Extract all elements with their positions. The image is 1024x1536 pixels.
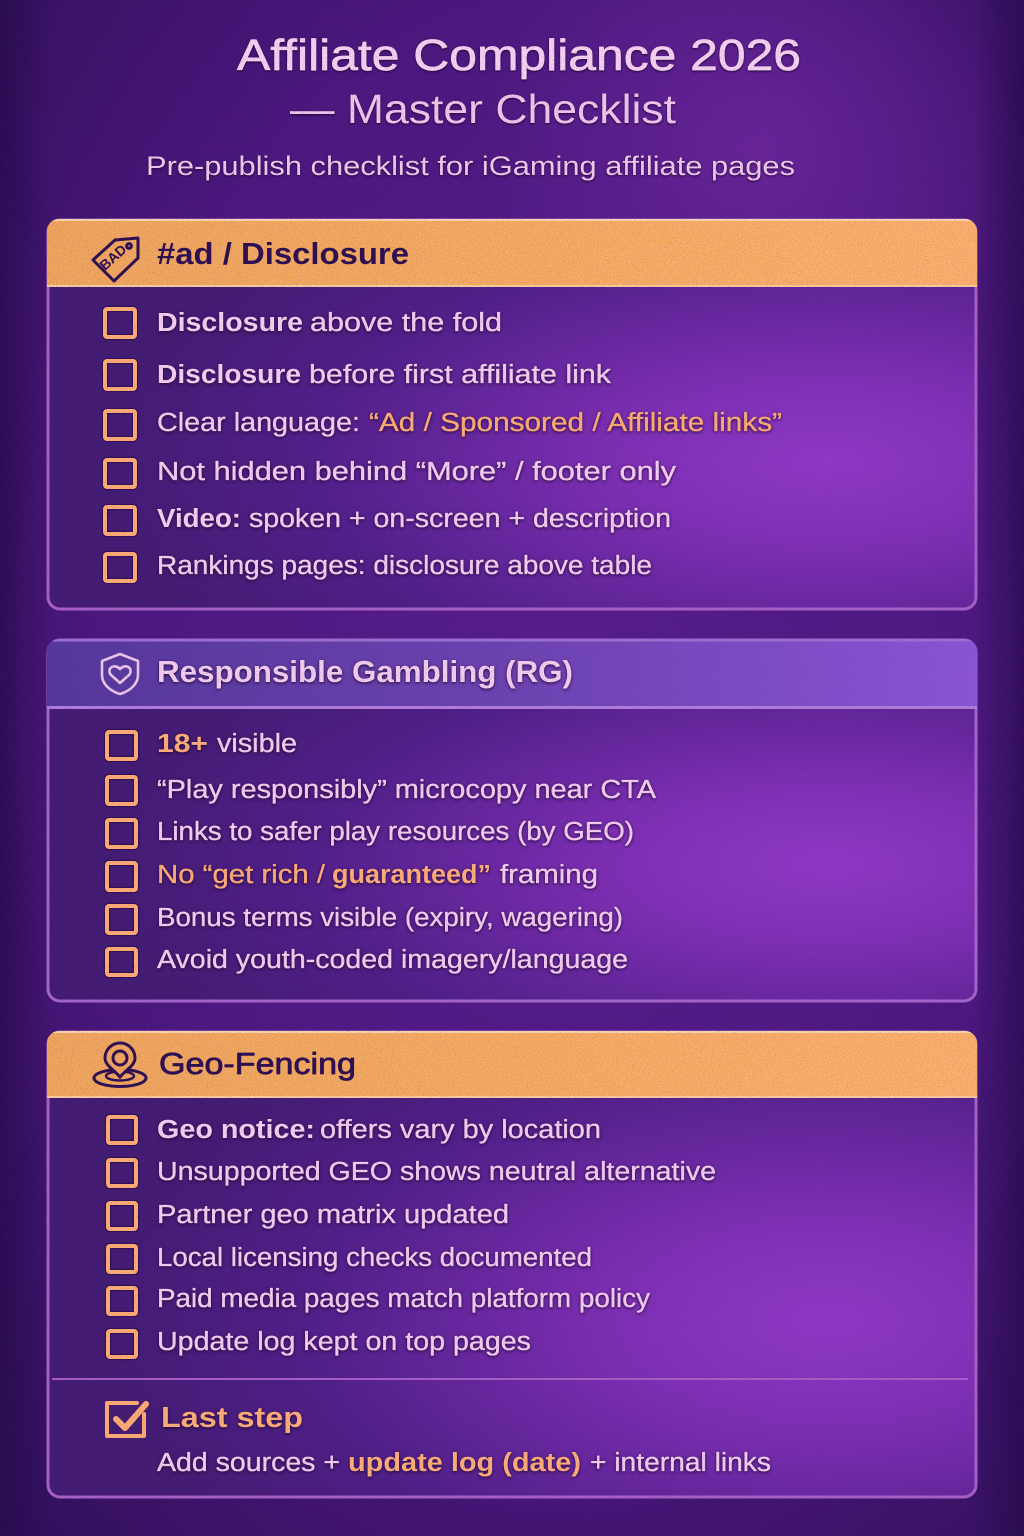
checklist item 2: Unsupported GEO shows neutral alternative bbox=[157, 1158, 716, 1186]
last step block bbox=[107, 1402, 771, 1477]
icon: price tag bbox=[93, 238, 138, 281]
panel: #ad / Disclosure bbox=[47, 219, 977, 609]
heading: #ad / Disclosure: #ad / Disclosure bbox=[157, 236, 409, 271]
checklist item 4 bbox=[107, 861, 598, 890]
checklist item 5: Bonus terms visible (expiry, wagering) bbox=[157, 904, 623, 932]
last step text: update log (date) bbox=[348, 1449, 581, 1477]
subtitle: Pre-publish checklist for iGaming affiliate pages bbox=[146, 151, 795, 181]
heading: Geo-Fencing: Geo-Fencing bbox=[159, 1046, 356, 1081]
checklist item 6: Rankings pages: disclosure above table bbox=[157, 552, 652, 580]
checklist item 4: Not hidden behind “More” / footer only bbox=[157, 458, 676, 486]
icon: checked box bbox=[107, 1403, 146, 1436]
title block bbox=[146, 31, 801, 181]
title line 2: — Master Checklist bbox=[290, 86, 677, 132]
heading: Last step: Last step bbox=[161, 1402, 303, 1434]
last step text: Add sources + bbox=[157, 1449, 340, 1477]
heading: Responsible Gambling (RG): Responsible Gambling (RG) bbox=[157, 654, 573, 689]
checklist item 1: 18+ bbox=[157, 730, 208, 758]
icon: map pin bbox=[94, 1043, 146, 1086]
checklist item 2: before first affiliate link bbox=[309, 361, 611, 389]
checklist item 4: guaranteed” bbox=[332, 861, 491, 889]
checklist item 5: spoken + on-screen + description bbox=[249, 505, 671, 533]
icon: price tag: BAD bbox=[96, 241, 130, 273]
checklist item 1: above the fold bbox=[310, 309, 502, 337]
checklist item 2: “Play responsibly” microcopy near CTA bbox=[157, 776, 656, 804]
checklist item 1 bbox=[108, 1116, 601, 1144]
checklist item 5: Video: bbox=[157, 505, 241, 533]
panel header: responsible gambling bbox=[47, 639, 977, 709]
checklist item 3: “Ad / Sponsored / Affiliate links” bbox=[369, 409, 782, 437]
checklist item 3 bbox=[105, 409, 782, 439]
panel: Responsible Gambling bbox=[47, 639, 977, 1001]
checklist item 1: offers vary by location bbox=[320, 1116, 601, 1144]
title line 1: Affiliate Compliance 2026 bbox=[237, 31, 801, 80]
checklist item 4: framing bbox=[500, 861, 598, 889]
last step text bbox=[157, 1449, 771, 1477]
checklist item 3: Clear language: bbox=[157, 409, 360, 437]
checklist item 2: Disclosure bbox=[157, 361, 301, 389]
checklist item 1 bbox=[107, 730, 297, 759]
checklist item 4: No “get rich / bbox=[157, 861, 326, 889]
checklist item 3: Partner geo matrix updated bbox=[157, 1201, 509, 1229]
panel header: geo-fencing bbox=[47, 1031, 977, 1098]
last step text: + internal links bbox=[590, 1449, 771, 1477]
icon: shield with heart bbox=[102, 654, 138, 694]
checklist item 3: Links to safer play resources (by GEO) bbox=[157, 818, 634, 846]
checklist item 2 bbox=[105, 361, 611, 389]
checklist item 5 bbox=[105, 505, 671, 534]
checklist item 6: Update log kept on top pages bbox=[157, 1328, 531, 1356]
panel: Geo-Fencing bbox=[47, 1031, 977, 1497]
checklist item 5: Paid media pages match platform policy bbox=[157, 1285, 650, 1313]
checklist item 1: Disclosure bbox=[157, 309, 303, 337]
checklist item 1 bbox=[105, 309, 502, 337]
checklist item 6: Avoid youth-coded imagery/language bbox=[157, 946, 628, 974]
checklist item 1: visible bbox=[217, 730, 297, 758]
checklist item 4: Local licensing checks documented bbox=[157, 1244, 592, 1272]
checklist item 1: Geo notice: bbox=[157, 1116, 315, 1144]
panel header: disclosure bbox=[47, 219, 977, 287]
